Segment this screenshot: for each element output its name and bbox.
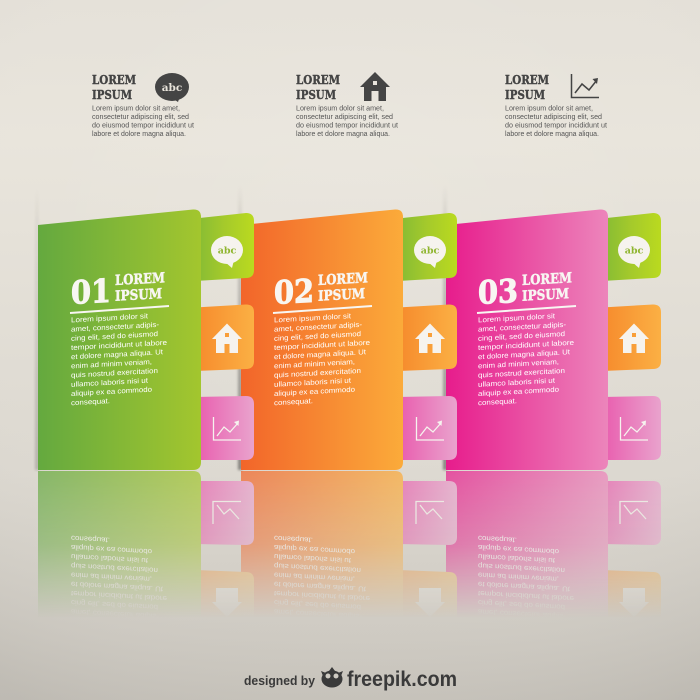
body text: consequat.	[478, 396, 517, 407]
icon: speech bubble: abc	[162, 82, 182, 94]
footer: designed by freepik	[244, 667, 457, 691]
reflection of the cards: et dolore magna aliqua. Ut	[274, 580, 366, 594]
text block: Lorem ipsum dolor sit amet,	[505, 106, 593, 112]
tab: house orange	[195, 304, 254, 371]
heading: lorem ipsum chart: LOREM	[505, 73, 549, 87]
body text	[71, 310, 167, 407]
tab: chart pink	[602, 396, 661, 460]
shadow	[238, 185, 242, 470]
body text: aliquip ex ea commodo	[274, 385, 355, 398]
tab: abc green	[398, 213, 457, 281]
body text: tempor incididunt ut labore	[274, 338, 370, 352]
text block	[296, 106, 398, 138]
text block: do eiusmod tempor incididunt ut	[296, 122, 398, 130]
body text: Lorem ipsum dolor sit	[478, 311, 555, 324]
number and heading: 01	[71, 272, 111, 312]
text block: consectetur adipiscing elit, sed	[296, 114, 393, 121]
tab: abc green	[195, 213, 254, 281]
reflection of the cards: amet, consectetur adipis-	[71, 607, 160, 621]
text block: labore et dolore magna aliqua.	[505, 131, 599, 138]
body text: amet, consectetur adipis-	[71, 320, 160, 334]
heading: lorem ipsum abc: IPSUM	[92, 88, 132, 102]
body text: cing elit, sed do eiusmod	[274, 329, 361, 343]
heading: lorem ipsum chart	[505, 73, 549, 102]
text block: labore et dolore magna aliqua.	[92, 131, 186, 138]
body text	[478, 310, 574, 407]
text block	[505, 106, 607, 138]
body text: amet, consectetur adipis-	[274, 320, 363, 334]
body text: ullamco laboris nisi ut	[478, 376, 555, 389]
brand name: freepik.com	[347, 668, 457, 691]
card shape	[241, 209, 403, 470]
number and heading: 03	[478, 272, 518, 312]
body text: Lorem ipsum dolor sit	[274, 311, 351, 324]
text block: do eiusmod tempor incididunt ut	[505, 122, 607, 130]
reflection of the cards: tempor incididunt ut labore	[274, 589, 370, 603]
reflection of the cards: amet, consectetur adipis-	[274, 607, 363, 621]
body text: enim ad minim veniam,	[71, 357, 152, 370]
divider rule	[70, 306, 169, 313]
body text: consequat.	[71, 396, 110, 407]
tab: chart pink	[398, 396, 457, 460]
icon: line chart	[572, 74, 599, 98]
number and heading: IPSUM	[522, 286, 569, 305]
reflection of the cards: quis nostrud exercitation	[274, 561, 361, 575]
number and heading: 02	[274, 272, 314, 312]
text block: Lorem ipsum dolor sit amet,	[92, 106, 180, 112]
credit text: designed by	[244, 673, 316, 688]
text block: do eiusmod tempor incididunt ut	[92, 122, 194, 130]
heading: lorem ipsum house: LOREM	[296, 73, 340, 87]
body text: consequat.	[274, 396, 313, 407]
body text: enim ad minim veniam,	[478, 357, 559, 370]
heading: lorem ipsum chart: IPSUM	[505, 88, 545, 102]
reflection of the cards: cing elit, sed do eiusmod	[478, 598, 565, 612]
reflection of the cards: Lorem ipsum dolor sit	[274, 617, 351, 630]
body text: ullamco laboris nisi ut	[71, 376, 148, 389]
reflection of the cards	[38, 471, 661, 610]
body text: quis nostrud exercitation	[71, 366, 158, 380]
reflection of the cards: Lorem ipsum dolor sit	[71, 617, 148, 630]
number and heading: LOREM	[522, 270, 572, 289]
number and heading	[71, 269, 165, 312]
reflection of the cards: consequat.	[274, 534, 313, 545]
reflection of the cards: aliquip ex ea commodo	[71, 543, 152, 556]
panel: intro chart	[505, 73, 607, 138]
reflection of the cards: cing elit, sed do eiusmod	[71, 598, 158, 612]
reflection of the cards: ullamco laboris nisi ut	[274, 552, 351, 565]
panel: card 03 pink	[443, 185, 661, 470]
body text: aliquip ex ea commodo	[478, 385, 559, 398]
reflection of the cards: quis nostrud exercitation	[71, 561, 158, 575]
reflection of the cards: cing elit, sed do eiusmod	[274, 598, 361, 612]
icon: freepik logo	[321, 667, 343, 688]
reflection of the cards: consequat.	[478, 534, 517, 545]
panel: intro house	[296, 72, 398, 138]
body text: Lorem ipsum dolor sit	[71, 311, 148, 324]
number and heading: IPSUM	[318, 286, 365, 305]
number and heading: IPSUM	[115, 286, 162, 305]
number and heading: LOREM	[318, 270, 368, 289]
reflection of the cards: enim ad minim veniam,	[274, 571, 355, 584]
body text	[274, 310, 370, 407]
body text: enim ad minim veniam,	[274, 357, 355, 370]
tab: abc green: abc	[625, 246, 644, 256]
body text: et dolore magna aliqua. Ut	[274, 347, 366, 361]
body text: quis nostrud exercitation	[274, 366, 361, 380]
body text: aliquip ex ea commodo	[71, 385, 152, 398]
number and heading	[478, 269, 572, 312]
text block: Lorem ipsum dolor sit amet,	[296, 106, 384, 112]
reflection of the cards: et dolore magna aliqua. Ut	[478, 580, 570, 594]
tab: house orange	[602, 304, 661, 371]
card shape	[38, 209, 201, 470]
panel: card 01 green	[35, 185, 254, 470]
reflection of the cards: aliquip ex ea commodo	[274, 543, 355, 556]
icon: house	[360, 72, 390, 101]
heading: lorem ipsum house: IPSUM	[296, 88, 336, 102]
tab: abc green: abc	[421, 246, 440, 256]
body text: cing elit, sed do eiusmod	[478, 329, 565, 343]
text block	[92, 106, 194, 138]
number and heading: LOREM	[115, 270, 165, 289]
panel: card 02 orange	[238, 185, 457, 470]
reflection of the cards: quis nostrud exercitation	[478, 561, 565, 575]
shadow	[35, 185, 39, 470]
divider rule	[477, 306, 576, 313]
text block: labore et dolore magna aliqua.	[296, 131, 390, 138]
body text: quis nostrud exercitation	[478, 366, 565, 380]
panel: intro abc	[92, 73, 194, 138]
heading: lorem ipsum house	[296, 73, 340, 102]
reflection of the cards: tempor incididunt ut labore	[478, 589, 574, 603]
reflection of the cards: enim ad minim veniam,	[478, 571, 559, 584]
reflection of the cards: enim ad minim veniam,	[71, 571, 152, 584]
reflection of the cards: et dolore magna aliqua. Ut	[71, 580, 163, 594]
body text: tempor incididunt ut labore	[71, 338, 167, 352]
body text: amet, consectetur adipis-	[478, 320, 567, 334]
tab: abc green: abc	[218, 246, 237, 256]
reflection of the cards: tempor incididunt ut labore	[71, 589, 167, 603]
divider rule	[273, 306, 372, 313]
text block: consectetur adipiscing elit, sed	[505, 114, 602, 121]
body text: cing elit, sed do eiusmod	[71, 329, 158, 343]
shadow	[443, 185, 447, 470]
heading: lorem ipsum abc: LOREM	[92, 73, 136, 87]
body text: et dolore magna aliqua. Ut	[71, 347, 163, 361]
reflection of the cards: amet, consectetur adipis-	[478, 607, 567, 621]
number and heading	[274, 269, 368, 312]
tab: house orange	[398, 304, 457, 371]
card shape	[446, 209, 608, 470]
reflection of the cards: ullamco laboris nisi ut	[71, 552, 148, 565]
reflection of the cards: Lorem ipsum dolor sit	[478, 617, 555, 630]
heading: lorem ipsum abc	[92, 73, 136, 102]
body text: tempor incididunt ut labore	[478, 338, 574, 352]
text block: consectetur adipiscing elit, sed	[92, 114, 189, 121]
body text: et dolore magna aliqua. Ut	[478, 347, 570, 361]
reflection of the cards: aliquip ex ea commodo	[478, 543, 559, 556]
body text: ullamco laboris nisi ut	[274, 376, 351, 389]
reflection of the cards: ullamco laboris nisi ut	[478, 552, 555, 565]
tab: abc green	[602, 213, 661, 281]
reflection of the cards: consequat.	[71, 534, 110, 545]
tab: chart pink	[195, 396, 254, 460]
